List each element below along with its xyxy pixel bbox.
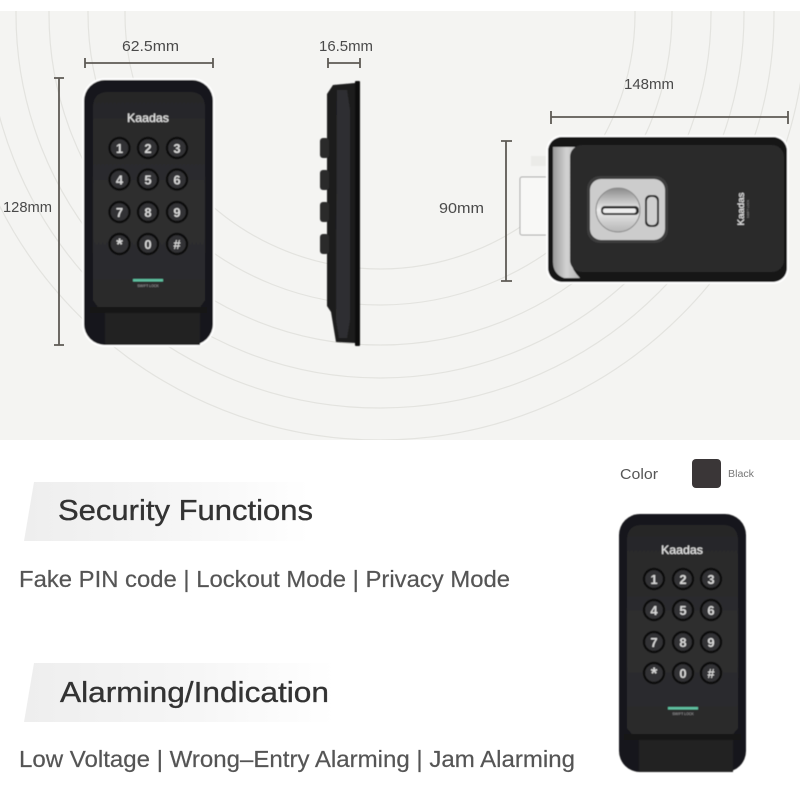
keypad buttons: 7 — [116, 205, 123, 220]
side view lock — [320, 81, 360, 346]
keypad buttons: 0 — [679, 666, 687, 681]
keypad buttons: * — [116, 235, 123, 254]
brand logo rotated: SWIFT LOCK — [746, 200, 750, 218]
heading: alarming and indication: Alarming/Indication — [60, 677, 329, 709]
brand logo: Kaadas — [127, 111, 169, 125]
keypad buttons: 6 — [173, 172, 181, 188]
keypad buttons: # — [173, 237, 181, 252]
panel: dimensions background — [0, 0, 800, 440]
keypad buttons: 4 — [116, 172, 124, 188]
dimension: body width 148mm — [551, 76, 788, 124]
silver side band — [553, 147, 580, 278]
dimension: side depth 16.5mm: 16.5mm — [319, 38, 373, 55]
text: security function list: Fake PIN code | Lockout Mode | Privacy Mode — [19, 566, 510, 592]
dimension: body height 90mm: 90mm — [439, 200, 484, 217]
keypad buttons: # — [707, 666, 715, 681]
color swatch: black — [692, 459, 721, 488]
status indicator — [668, 707, 698, 716]
keypad buttons: 9 — [707, 635, 715, 650]
bolt — [520, 156, 552, 235]
status indicator — [133, 279, 163, 288]
dimension: body height 90mm — [439, 141, 512, 281]
keypad buttons: 3 — [173, 141, 181, 156]
keypad buttons — [110, 138, 187, 254]
keypad buttons: 7 — [650, 635, 658, 650]
heading: security functions — [24, 482, 313, 541]
dimension: side depth 16.5mm — [319, 38, 373, 68]
color label: Color — [620, 466, 658, 483]
text: alarm list: Low Voltage | Wrong–Entry Alarming | Jam Alarming — [19, 746, 575, 772]
keypad buttons — [644, 569, 721, 683]
dimension: front width 62.5mm — [85, 38, 213, 68]
keypad buttons: 2 — [144, 141, 152, 156]
heading: security functions: Security Functions — [58, 495, 313, 527]
keypad buttons: 4 — [650, 603, 658, 618]
heading: alarming and indication — [24, 663, 335, 722]
keypad buttons: * — [651, 664, 658, 683]
side keypad buttons — [320, 138, 329, 254]
keypad buttons: 5 — [144, 172, 152, 188]
dimension: body width 148mm: 148mm — [624, 76, 674, 93]
keypad buttons: 6 — [707, 603, 715, 618]
swatch label: Black — [728, 469, 755, 480]
dimension: front height 128mm — [3, 78, 64, 345]
status indicator: SWIFT LOCK — [137, 284, 159, 288]
status indicator: SWIFT LOCK — [672, 712, 694, 716]
keypad buttons: 8 — [144, 205, 152, 220]
rear body lock — [520, 135, 789, 284]
keypad buttons: 5 — [679, 603, 687, 618]
keypad buttons: 3 — [707, 572, 715, 587]
keypad buttons: 1 — [116, 141, 123, 156]
keypad buttons: 2 — [679, 572, 687, 587]
dimension: front height 128mm: 128mm — [3, 199, 52, 216]
front view keypad lock — [82, 78, 215, 347]
keypad buttons: 8 — [679, 635, 687, 650]
keypad buttons: 1 — [650, 572, 658, 587]
brand logo rotated: Kaadas — [736, 192, 747, 226]
product photo: keypad lock in black — [619, 514, 746, 772]
thumbturn plate — [587, 176, 668, 243]
keypad buttons: 9 — [173, 205, 181, 220]
dimension: front width 62.5mm: 62.5mm — [122, 38, 179, 55]
keypad buttons: 0 — [144, 237, 152, 252]
brand logo: Kaadas — [661, 543, 703, 557]
